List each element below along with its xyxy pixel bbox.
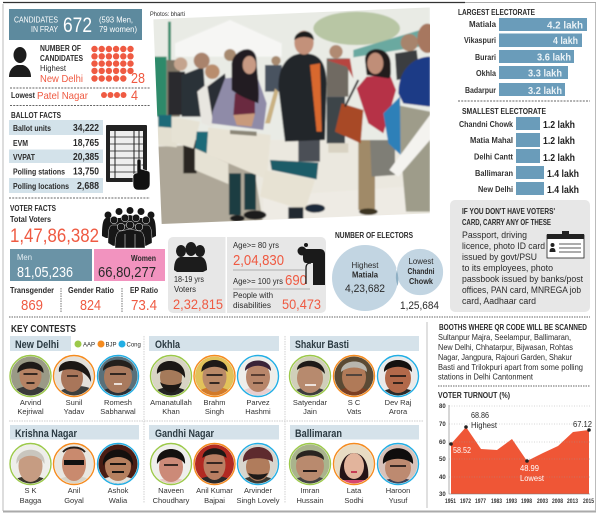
icon: group of young voters bbox=[174, 242, 207, 272]
text: number of candidates: NUMBER OF bbox=[40, 44, 81, 53]
text: age 100 plus: 690 bbox=[285, 272, 307, 289]
text: total voters bbox=[10, 215, 99, 247]
text: number of candidates: CANDIDATES bbox=[40, 54, 84, 63]
chart: largest electorate: Okhla bbox=[476, 69, 496, 78]
icon: voting machine and hand bbox=[106, 125, 150, 190]
table: ballot facts: Ballot units bbox=[13, 124, 51, 133]
stat: transgender: Transgender bbox=[10, 286, 54, 295]
panel: candidates in fray banner: (593 Men, bbox=[99, 16, 133, 24]
name: S K Bagga: S K bbox=[24, 486, 37, 495]
contest: Shakur Basti bbox=[288, 336, 420, 416]
name: Amanatullah Khan: Amanatullah bbox=[150, 398, 192, 407]
panel: voter ID alternatives: Passport, driving bbox=[462, 230, 527, 240]
panel: voter ID alternatives: to its employees, photo bbox=[462, 263, 553, 273]
chart: largest electorate: Vikaspuri bbox=[464, 36, 496, 45]
chart: voter turnout area bbox=[439, 404, 595, 505]
table: ballot facts: Polling locations bbox=[13, 182, 69, 191]
portrait: Arvind Kejriwal bbox=[9, 354, 52, 398]
text: lowest Patel Nagar: 4 bbox=[131, 87, 138, 103]
heading: ballot facts: BALLOT FACTS bbox=[11, 111, 62, 120]
panel: voter ID alternatives: card, Aadhaar card bbox=[462, 296, 536, 306]
text: age 80 plus bbox=[233, 241, 284, 269]
name: Romesh Sabharwal bbox=[100, 398, 136, 416]
text: lowest Patel Nagar bbox=[11, 87, 138, 103]
chart: smallest electorate bbox=[459, 107, 579, 196]
name: Arvinder Singh Lovely bbox=[237, 486, 280, 505]
table: ballot facts: 18,765 bbox=[73, 138, 99, 149]
contest: Gandhi Nagar: Gandhi Nagar bbox=[155, 428, 215, 440]
panel: voter ID alternatives: licence, photo ID card bbox=[462, 241, 545, 251]
name: Brahm Singh: Brahm bbox=[203, 398, 226, 407]
panel: women voters: Women bbox=[131, 254, 156, 263]
name: Imran Hussain bbox=[296, 486, 324, 505]
name: Ashok Walia bbox=[108, 486, 129, 505]
chart: electors circles: Highest bbox=[352, 261, 379, 270]
panel: voter ID alternatives: CARD, CARRY ANY OF THESE bbox=[462, 218, 551, 227]
table: ballot facts bbox=[9, 120, 103, 193]
portrait: S C Vats bbox=[332, 354, 376, 398]
icon: crowd of voters bbox=[102, 207, 156, 248]
name: Parvez Hashmi bbox=[245, 398, 271, 416]
name: Imran Hussain: Imran bbox=[300, 486, 320, 495]
text: people with disabilities bbox=[233, 291, 321, 312]
stat: EP ratio: 73.4 bbox=[131, 297, 157, 314]
legend: party colours: BJP bbox=[106, 342, 117, 348]
chart: smallest electorate: 1.2 lakh bbox=[543, 153, 575, 164]
chart: voter turnout area: 1983 bbox=[491, 499, 503, 505]
panel: candidates in fray banner bbox=[9, 9, 142, 40]
icon: elderly person bbox=[298, 243, 325, 285]
table: ballot facts: Polling stations bbox=[13, 168, 65, 176]
name: Romesh Sabharwal: Sabharwal bbox=[100, 407, 136, 416]
chart: smallest electorate: Matia Mahal bbox=[470, 136, 513, 145]
legend: party colours: AAP bbox=[83, 342, 95, 348]
divider right column bbox=[458, 100, 590, 102]
name: Dev Raj Arora: Dev Raj bbox=[385, 398, 412, 407]
portrait: Anil Goyal bbox=[52, 442, 96, 486]
panel: women voters: 66,80,277 bbox=[98, 264, 156, 281]
chart: smallest electorate: 1.4 lakh bbox=[547, 185, 579, 196]
stat: EP ratio: EP Ratio bbox=[130, 286, 158, 295]
stat: gender ratio: 824 bbox=[80, 297, 101, 314]
text: total voters: 1,47,86,382 bbox=[10, 226, 99, 247]
legend: party colours: Cong bbox=[126, 342, 141, 348]
chart: voter turnout area: 50 bbox=[439, 457, 446, 463]
text: people with disabilities: People with bbox=[233, 291, 273, 300]
portrait: Naveen Choudhary bbox=[150, 442, 192, 486]
chart: smallest electorate: SMALLEST ELECTORATE bbox=[462, 107, 547, 116]
stat: gender ratio: Gender Ratio bbox=[68, 286, 114, 295]
name: S K Bagga bbox=[20, 486, 42, 505]
table: ballot facts: 13,750 bbox=[73, 166, 99, 178]
name: Romesh Sabharwal: Romesh bbox=[104, 398, 132, 407]
text: people with disabilities: disabilities bbox=[233, 301, 271, 310]
panel: women voters bbox=[94, 249, 165, 281]
portrait: Sunil Yadav bbox=[52, 354, 96, 398]
text: total voters: Total Voters bbox=[10, 215, 51, 224]
name: Anil Goyal: Anil bbox=[68, 486, 81, 495]
name: Naveen Choudhary bbox=[153, 486, 190, 505]
name: Anil Kumar Bajpai bbox=[196, 486, 233, 505]
table: ballot facts: EVM bbox=[13, 139, 28, 148]
name: Anil Kumar Bajpai: Bajpai bbox=[204, 496, 225, 505]
text: QR code booths: Basti and Trilokpuri apart from some polling bbox=[438, 363, 583, 372]
name: Anil Goyal bbox=[64, 486, 84, 505]
contest: Ballimaran: Ballimaran bbox=[295, 428, 342, 440]
text: QR code booths bbox=[438, 323, 587, 382]
chart: voter turnout area: 1977 bbox=[475, 499, 487, 505]
icon: ID card bbox=[547, 231, 584, 258]
chart: voter turnout area: 68.86 bbox=[471, 411, 489, 420]
text: lowest Patel Nagar: Patel Nagar bbox=[37, 90, 88, 102]
portrait: Imran Hussain bbox=[288, 442, 332, 486]
text: QR code booths: New Delhi, Chhatarpur, Bijwasan, Rohtas bbox=[438, 343, 573, 352]
text: 18-19 yrs voters: Voters bbox=[174, 285, 196, 294]
chart: largest electorate: 3.6 lakh bbox=[537, 52, 571, 64]
text: age 100 plus bbox=[233, 272, 307, 289]
portrait: Parvez Hashmi bbox=[236, 354, 280, 398]
name: Dev Raj Arora: Arora bbox=[389, 407, 408, 416]
text: number of candidates: New Delhi bbox=[40, 73, 83, 85]
table: ballot facts: 34,222 bbox=[73, 123, 99, 134]
portrait: Lata Sodhi bbox=[332, 442, 376, 486]
name: Anil Goyal: Goyal bbox=[64, 496, 84, 505]
chart: voter turnout area: 60 bbox=[439, 440, 446, 446]
name: Sunil Yadav: Yadav bbox=[64, 407, 85, 416]
panel: men voters: 81,05,236 bbox=[17, 264, 73, 281]
contest: New Delhi bbox=[8, 336, 140, 416]
portrait: Brahm Singh bbox=[193, 354, 236, 398]
text: people with disabilities: 50,473 bbox=[282, 296, 321, 312]
name: Arvind Kejriwal: Arvind bbox=[20, 398, 41, 407]
name: Imran Hussain: Hussain bbox=[296, 496, 324, 505]
name: Sunil Yadav: Sunil bbox=[66, 398, 83, 407]
heading: voter facts: VOTER FACTS bbox=[10, 204, 57, 213]
name: Arvind Kejriwal: Kejriwal bbox=[17, 407, 44, 416]
name: Anil Kumar Bajpai: Anil Kumar bbox=[196, 486, 233, 495]
name: Haroon Yusuf bbox=[386, 486, 410, 505]
chart: largest electorate: Burari bbox=[475, 53, 496, 62]
portrait: Amanatullah Khan bbox=[150, 354, 192, 398]
contest: Okhla bbox=[149, 336, 280, 416]
chart: voter turnout area: 48.99 bbox=[520, 464, 540, 473]
name: Haroon Yusuf: Haroon bbox=[386, 486, 410, 495]
text: number of candidates: Highest bbox=[40, 64, 67, 73]
chart: voter turnout area: 30 bbox=[439, 492, 446, 498]
chart: voter turnout area: 1972 bbox=[460, 499, 472, 505]
table: ballot facts: VVPAT bbox=[13, 153, 35, 162]
name: Naveen Choudhary: Naveen bbox=[158, 486, 184, 495]
text: age 80 plus: Age>= 80 yrs bbox=[233, 241, 279, 250]
text: QR code booths: Nagar, Jangpura, Rajouri Garden, Shakur bbox=[438, 353, 572, 362]
name: Brahm Singh: Singh bbox=[205, 407, 224, 416]
contest: New Delhi: New Delhi bbox=[15, 339, 59, 351]
name: Parvez Hashmi: Hashmi bbox=[245, 407, 271, 416]
heading: key contests: KEY CONTESTS bbox=[11, 324, 76, 335]
name: Arvind Kejriwal bbox=[17, 398, 44, 416]
stat: gender ratio bbox=[68, 286, 114, 314]
chart: largest electorate: 3.2 lakh bbox=[528, 86, 562, 97]
name: Lata Sodhi: Sodhi bbox=[344, 496, 364, 505]
name: Satyendar Jain bbox=[293, 398, 328, 416]
portrait: Satyendar Jain bbox=[288, 354, 332, 398]
text: 18-19 yrs voters: 18-19 yrs bbox=[174, 275, 204, 284]
table: ballot facts: 2,688 bbox=[77, 181, 99, 192]
contest: Ballimaran bbox=[288, 425, 420, 505]
photo: polling staff carrying voting machines bbox=[154, 8, 430, 224]
table: ballot facts: 20,385 bbox=[73, 152, 99, 163]
chart: voter turnout area: 40 bbox=[439, 475, 446, 481]
panel: voter ID alternatives: IF YOU DON'T HAVE VOTERS' bbox=[462, 207, 555, 216]
chart: voter turnout area: 1951 bbox=[445, 499, 457, 505]
name: Parvez Hashmi: Parvez bbox=[246, 398, 270, 407]
name: Dev Raj Arora bbox=[385, 398, 412, 416]
icon: candidate silhouette bbox=[9, 47, 31, 77]
chart: voter turnout area: Highest bbox=[471, 421, 498, 430]
panel: candidates in fray banner: 672 bbox=[63, 14, 92, 37]
portrait: Dev Raj Arora bbox=[376, 354, 420, 398]
chart: voter turnout area: 67.12 bbox=[573, 420, 593, 429]
panel: candidates in fray banner: CANDIDATES bbox=[14, 16, 58, 24]
portrait: Haroon Yusuf bbox=[376, 442, 420, 486]
name: Ashok Walia: Ashok bbox=[108, 486, 129, 495]
name: Naveen Choudhary: Choudhary bbox=[153, 496, 190, 505]
stat: EP ratio bbox=[130, 286, 158, 314]
panel: young voters and senior voters bbox=[168, 237, 326, 313]
name: Arvinder Singh Lovely: Arvinder bbox=[244, 486, 272, 495]
chart: largest electorate: Badarpur bbox=[465, 86, 496, 95]
portrait: Romesh Sabharwal bbox=[96, 354, 140, 398]
text: lowest Patel Nagar: Lowest bbox=[11, 91, 35, 100]
portrait: Ashok Walia bbox=[96, 442, 140, 486]
chart: largest electorate: Matiala bbox=[469, 20, 497, 29]
chart: largest electorate: LARGEST ELECTORATE bbox=[458, 8, 536, 17]
text: 18-19 yrs voters: 2,32,815 bbox=[173, 296, 223, 312]
chart: voter turnout area: 2013 bbox=[567, 499, 579, 505]
chart: smallest electorate: New Delhi bbox=[478, 185, 513, 194]
name: S C Vats: Vats bbox=[347, 407, 361, 416]
chart: smallest electorate: 1.4 lakh bbox=[547, 169, 579, 180]
name: Lata Sodhi: Lata bbox=[347, 486, 362, 495]
panel: voter ID alternatives: offices, PAN card, MNREGA job bbox=[462, 285, 581, 295]
name: Brahm Singh bbox=[203, 398, 226, 416]
chart: dots for 28 candidates bbox=[91, 46, 145, 87]
contest: Gandhi Nagar bbox=[149, 425, 280, 505]
panel: voter ID alternatives: passbook issued by banks/post bbox=[462, 274, 583, 284]
chart: voter turnout area: 1998 bbox=[521, 499, 533, 505]
chart: largest electorate: 4.2 lakh bbox=[547, 20, 583, 32]
name: Haroon Yusuf: Yusuf bbox=[389, 496, 408, 505]
chart: largest electorate bbox=[458, 8, 587, 97]
chart: largest electorate: 4 lakh bbox=[553, 36, 578, 47]
chart: electors circles: Chowk bbox=[409, 277, 433, 286]
name: Arvinder Singh Lovely: Singh Lovely bbox=[237, 496, 280, 505]
divider lines upper left bbox=[9, 88, 150, 198]
chart: voter turnout area: 2008 bbox=[552, 499, 564, 505]
chart: dots for 28 candidates: 28 bbox=[131, 70, 145, 87]
chart: electors circles: Chandni bbox=[408, 267, 434, 276]
heading: number of electors: NUMBER OF ELECTORS bbox=[335, 231, 414, 240]
chart: electors circles: 1,25,684 bbox=[400, 300, 439, 312]
contest: Krishna Nagar bbox=[8, 425, 140, 505]
name: Sunil Yadav bbox=[64, 398, 85, 416]
text: age 100 plus: Age>= 100 yrs bbox=[233, 277, 283, 286]
panel: men voters bbox=[10, 249, 92, 281]
name: Satyendar Jain: Satyendar bbox=[293, 398, 328, 407]
panel: voter ID alternatives bbox=[450, 200, 590, 312]
chart: electors circles: Matiala bbox=[352, 270, 379, 280]
chart: voter turnout area: 2003 bbox=[537, 499, 549, 505]
panel: candidates in fray banner: 79 women) bbox=[99, 25, 137, 34]
contest: Okhla: Okhla bbox=[155, 339, 181, 351]
name: S C Vats: S C bbox=[348, 398, 361, 407]
chart: smallest electorate: Ballimaran bbox=[475, 169, 513, 178]
chart: voter turnout area: 1993 bbox=[506, 499, 518, 505]
chart: smallest electorate: 1.2 lakh bbox=[543, 136, 575, 147]
text: QR code booths: Sultanpur Majra, Seelampur, Ballimaran, bbox=[438, 333, 571, 342]
chart: smallest electorate: Chandni Chowk bbox=[459, 120, 513, 129]
panel: men voters: Men bbox=[17, 253, 32, 262]
stat: transgender: 869 bbox=[21, 297, 43, 314]
heading: voter turnout: VOTER TURNOUT (%) bbox=[438, 391, 510, 400]
chart: voter turnout area: 80 bbox=[439, 404, 446, 410]
portrait: S K Bagga bbox=[9, 442, 52, 486]
legend: party colours bbox=[74, 340, 141, 348]
name: Satyendar Jain: Jain bbox=[303, 407, 317, 416]
name: Lata Sodhi bbox=[344, 486, 364, 505]
portrait: Anil Kumar Bajpai bbox=[193, 442, 236, 486]
chart: electors circles: Lowest bbox=[408, 257, 434, 266]
portrait: Arvinder Singh Lovely bbox=[236, 442, 280, 486]
name: Amanatullah Khan: Khan bbox=[162, 407, 180, 416]
panel: voter ID alternatives: issued by govt/PSU bbox=[462, 252, 537, 262]
chart: voter turnout area: 70 bbox=[439, 422, 446, 428]
chart: smallest electorate: 1.2 lakh bbox=[543, 120, 575, 131]
text: age 80 plus: 2,04,830 bbox=[233, 252, 284, 269]
text: QR code booths: stations in Delhi Cantonment bbox=[438, 372, 534, 382]
name: Amanatullah Khan bbox=[150, 398, 192, 416]
chart: voter turnout area: 2015 bbox=[583, 499, 595, 505]
text: 18-19 yrs voters bbox=[173, 275, 223, 312]
name: S K Bagga: Bagga bbox=[20, 496, 42, 505]
text: number of candidates bbox=[40, 44, 84, 85]
chart: smallest electorate: Delhi Cantt bbox=[474, 152, 513, 162]
contest: Shakur Basti: Shakur Basti bbox=[295, 339, 349, 351]
chart: largest electorate: 3.3 lakh bbox=[528, 68, 562, 80]
photo credit: Photos: bharti bbox=[150, 12, 185, 18]
stat: transgender bbox=[10, 286, 54, 314]
contest: Krishna Nagar: Krishna Nagar bbox=[15, 428, 78, 440]
chart: voter turnout area: Lowest bbox=[520, 474, 545, 483]
name: Ashok Walia: Walia bbox=[109, 496, 128, 505]
chart: electors circles: 4,23,682 bbox=[345, 283, 385, 295]
chart: electors circles bbox=[332, 245, 444, 312]
name: S C Vats bbox=[347, 398, 361, 416]
panel: candidates in fray banner: IN FRAY bbox=[31, 25, 59, 34]
divider lines lower section bbox=[9, 288, 590, 508]
chart: voter turnout area: 58.52 bbox=[453, 446, 471, 455]
